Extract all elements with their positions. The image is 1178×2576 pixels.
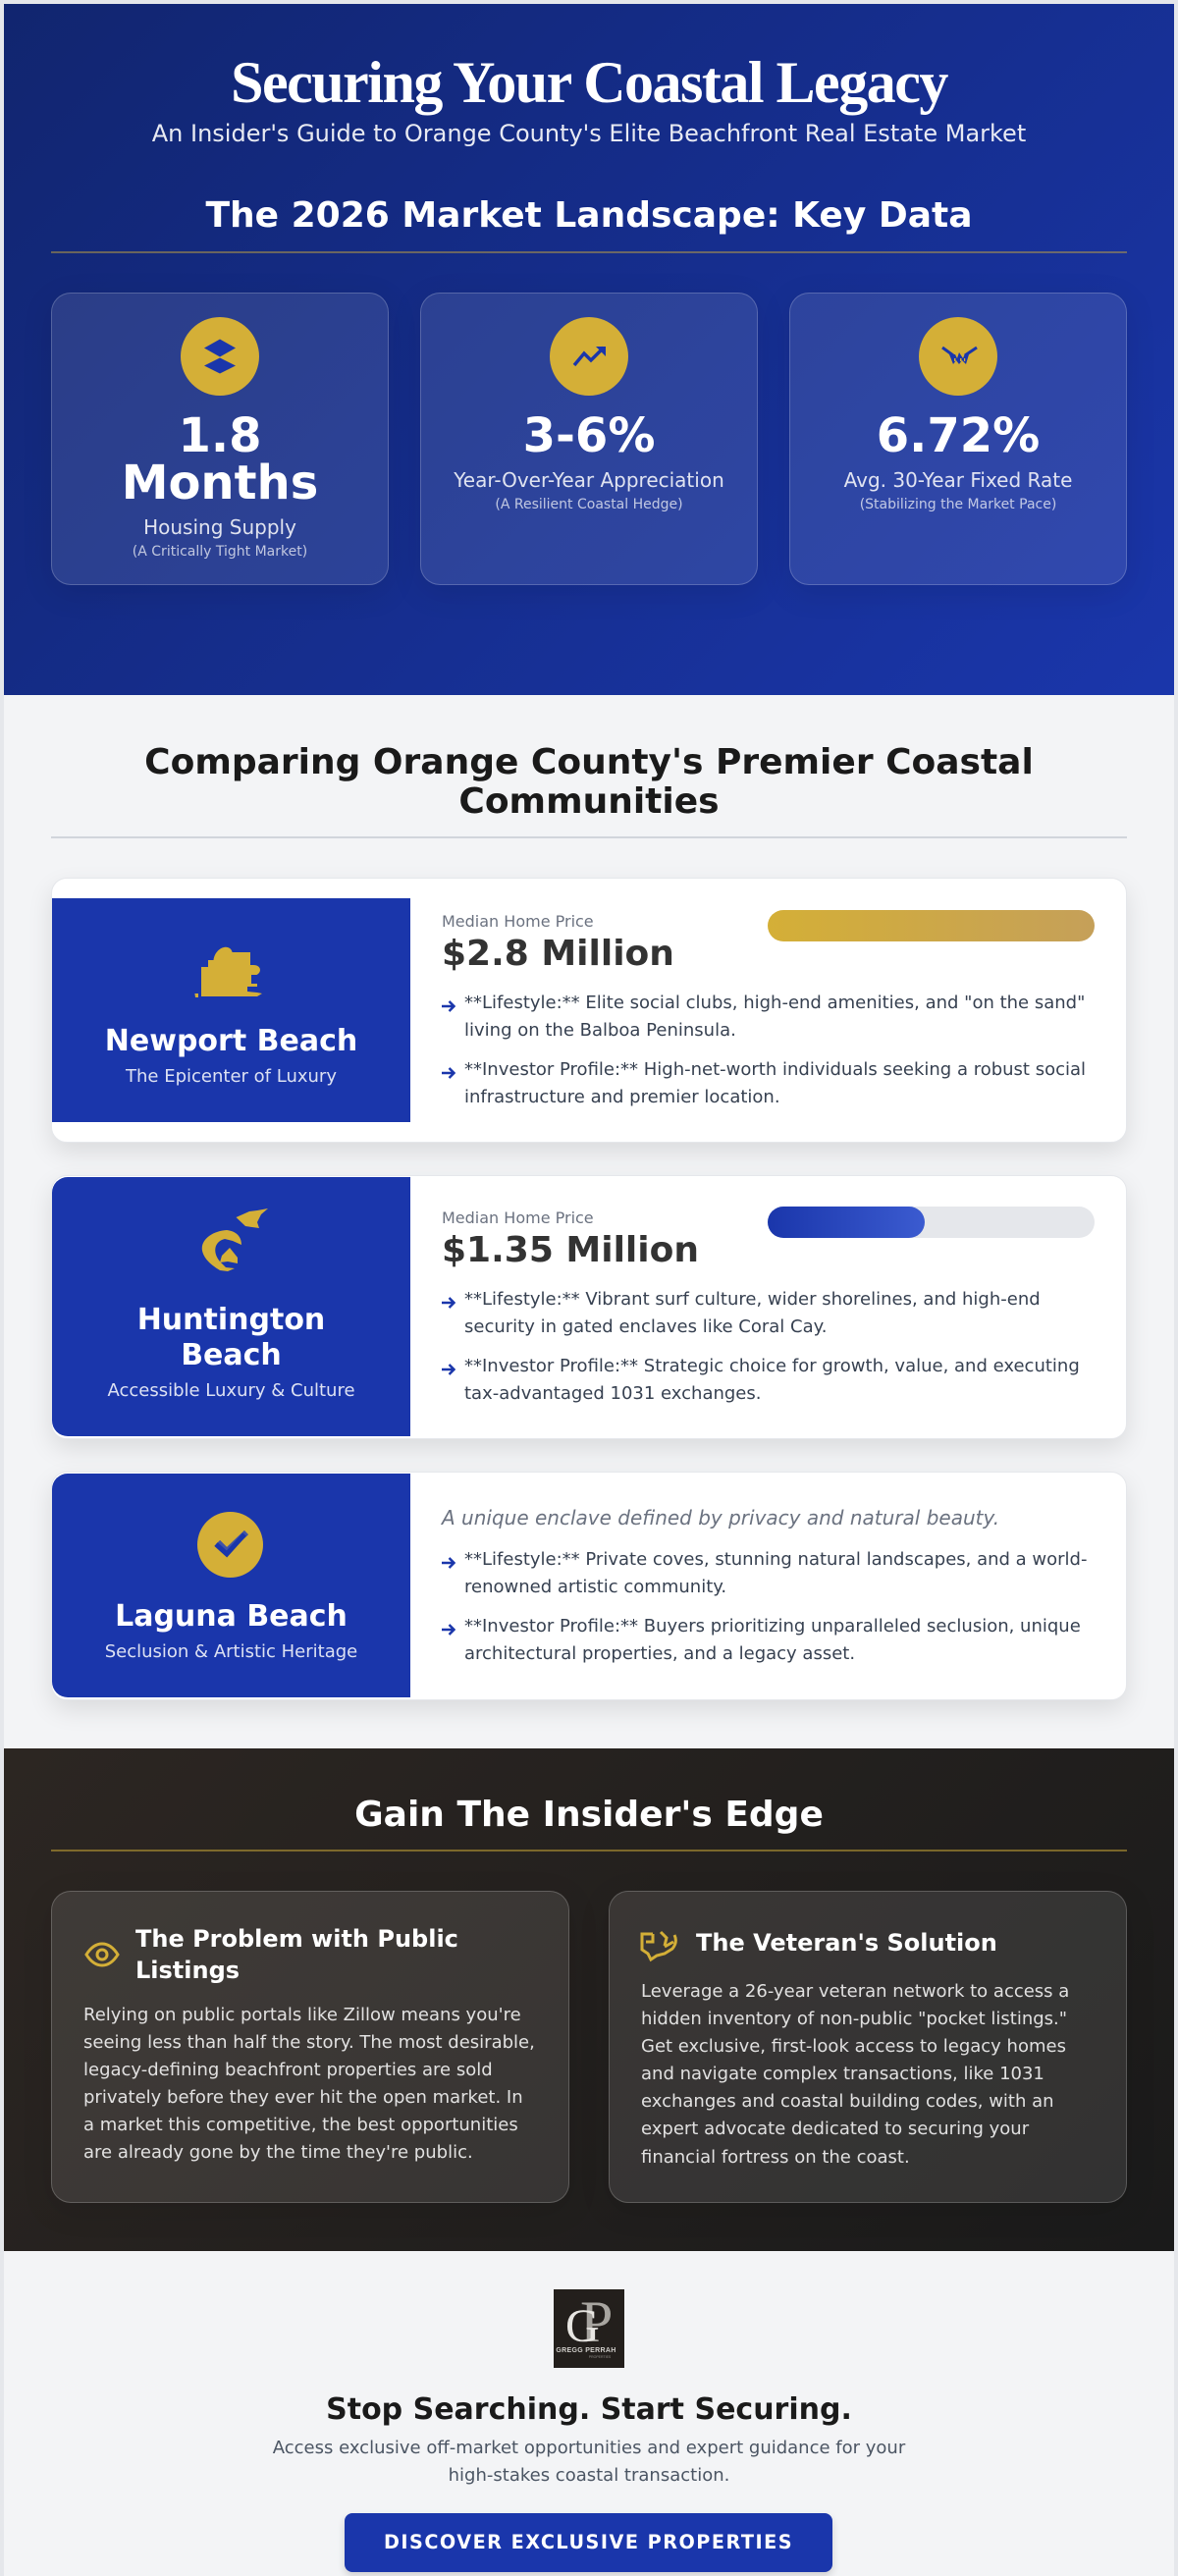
icon: newport building bbox=[194, 946, 262, 997]
logo: P bbox=[580, 2289, 613, 2354]
text: problem body: a market this competitive, the best opportunities bbox=[83, 2115, 518, 2135]
text: laguna lifestyle: **Lifestyle:** Private coves, stunning natural landscapes, and a world- bbox=[464, 1549, 1087, 1570]
text: newport lifestyle: **Lifestyle:** Elite social clubs, high-end amenities, and "on the sand" bbox=[464, 992, 1085, 1013]
heading: insider edge: Gain The Insider's Edge bbox=[354, 1795, 824, 1835]
icon: arrow bbox=[442, 1364, 455, 1375]
text: problem body: privately before they ever hit the open market. In bbox=[83, 2087, 523, 2108]
panel: laguna card bbox=[51, 1472, 1127, 1700]
text: huntington name bbox=[137, 1303, 325, 1372]
text: solution body: expert advocate dedicated to securing your bbox=[641, 2119, 1029, 2139]
text: newport tagline: The Epicenter of Luxury bbox=[126, 1066, 337, 1087]
subtitle: An Insider's Guide to Orange County's Elite Beachfront Real Estate Market bbox=[152, 120, 1026, 147]
logo: GREGG PERRAH bbox=[556, 2347, 616, 2354]
text: newport investor: infrastructure and premier location. bbox=[464, 1087, 780, 1107]
stat: 6.72% bbox=[844, 408, 1072, 512]
text: newport lifestyle bbox=[464, 992, 1085, 1041]
text: problem body bbox=[83, 2005, 535, 2163]
text: huntington name: Beach bbox=[181, 1338, 282, 1372]
text: solution body: Get exclusive, first-look access to legacy homes bbox=[641, 2036, 1066, 2057]
text: huntington price label: Median Home Price bbox=[442, 1208, 594, 1227]
divider bbox=[51, 1850, 1127, 1852]
panel: solution bbox=[609, 1891, 1127, 2203]
stat: 6.72%: (Stabilizing the Market Pace) bbox=[860, 497, 1056, 512]
text: laguna investor: architectural properties, and a legacy asset. bbox=[464, 1643, 855, 1664]
text: huntington lifestyle: **Lifestyle:** Vibrant surf culture, wider shorelines, and high-end bbox=[464, 1288, 1041, 1310]
text: huntington investor: tax-advantaged 1031 exchanges. bbox=[464, 1383, 761, 1404]
panel: newport header bbox=[52, 898, 410, 1122]
button bbox=[345, 2513, 832, 2572]
button: DISCOVER EXCLUSIVE PROPERTIES bbox=[384, 2531, 793, 2553]
text: problem heading bbox=[135, 1925, 458, 1984]
icon: arrow bbox=[442, 1067, 455, 1079]
text: problem heading: The Problem with Public bbox=[135, 1925, 458, 1953]
bar: huntington price bbox=[768, 1207, 1095, 1238]
panel: problem bbox=[51, 1891, 569, 2203]
text: newport name: Newport Beach bbox=[105, 1024, 357, 1058]
icon: arrow bbox=[442, 1557, 455, 1569]
text: solution body: hidden inventory of non-public "pocket listings." bbox=[641, 2009, 1067, 2029]
text: laguna lifestyle bbox=[464, 1549, 1087, 1597]
comparison section background bbox=[4, 695, 1174, 1748]
text: huntington price: $1.35 Million bbox=[442, 1230, 699, 1270]
insider section background bbox=[4, 1748, 1174, 2251]
header section: market landscape bbox=[4, 4, 1174, 695]
text: laguna tagline: Seclusion & Artistic Heritage bbox=[105, 1641, 357, 1662]
text: problem body: are already gone by the time they're public. bbox=[83, 2142, 473, 2163]
text: huntington tagline: Accessible Luxury & Culture bbox=[107, 1380, 355, 1401]
text: call to action: Access exclusive off-market opportunities and expert guidance for your bbox=[273, 2438, 905, 2458]
text: problem body: seeing less than half the story. The most desirable, bbox=[83, 2032, 535, 2053]
panel: fixed rate bbox=[789, 293, 1127, 585]
text: call to action bbox=[273, 2438, 905, 2486]
icon: eye bbox=[84, 1942, 120, 1967]
stat: 6.72%: 6.72% bbox=[877, 408, 1040, 463]
text: huntington investor: **Investor Profile:** Strategic choice for growth, value, and executing bbox=[464, 1356, 1080, 1376]
text: huntington investor bbox=[464, 1356, 1080, 1404]
text: newport lifestyle: living on the Balboa Peninsula. bbox=[464, 1019, 736, 1041]
heading: comparison bbox=[144, 742, 1034, 822]
panel: laguna header bbox=[52, 1474, 410, 1697]
logo: PROPERTIES bbox=[589, 2355, 612, 2359]
divider bbox=[51, 836, 1127, 838]
text: solution body bbox=[641, 1981, 1069, 2168]
logo: G bbox=[565, 2300, 600, 2352]
heading: comparison: Communities bbox=[458, 781, 720, 822]
panel: housing supply bbox=[51, 293, 389, 585]
title: Securing Your Coastal Legacy bbox=[231, 50, 947, 115]
icon: veteran bbox=[640, 1931, 677, 1961]
logo bbox=[554, 2289, 624, 2368]
text: laguna lifestyle: renowned artistic community. bbox=[464, 1577, 726, 1597]
heading: comparison: Comparing Orange County's Premier Coastal bbox=[144, 742, 1034, 782]
bar: newport price bbox=[768, 910, 1095, 941]
stat: 3-6% bbox=[454, 408, 724, 512]
icon: huntington wave bbox=[202, 1208, 268, 1271]
text: solution body: exchanges and coastal building codes, with an bbox=[641, 2091, 1054, 2112]
panel: huntington card bbox=[51, 1175, 1127, 1439]
heading: key data: The 2026 Market Landscape: Key Data bbox=[205, 195, 973, 236]
stat: 1.8 months: Housing Supply bbox=[143, 515, 296, 539]
text: laguna investor: **Investor Profile:** Buyers prioritizing unparalleled seclusion, unique bbox=[464, 1616, 1081, 1637]
stat: 3-6%: 3-6% bbox=[523, 408, 655, 463]
stat: 6.72%: Avg. 30-Year Fixed Rate bbox=[844, 468, 1072, 492]
stat: 3-6%: Year-Over-Year Appreciation bbox=[454, 468, 724, 492]
icon: laguna check bbox=[197, 1512, 263, 1578]
text: newport price: $2.8 Million bbox=[442, 934, 674, 974]
text: call to action: high-stakes coastal transaction. bbox=[449, 2465, 729, 2486]
text: laguna investor bbox=[464, 1616, 1081, 1664]
text: laguna name: Laguna Beach bbox=[115, 1599, 348, 1634]
icon: arrow bbox=[442, 1000, 455, 1012]
heading: call to action: Stop Searching. Start Securing. bbox=[326, 2392, 852, 2427]
panel: huntington header bbox=[52, 1177, 410, 1436]
icon: layers bbox=[181, 317, 259, 396]
text: laguna intro: A unique enclave defined by privacy and natural beauty. bbox=[442, 1506, 999, 1530]
panel: appreciation bbox=[420, 293, 758, 585]
footer section background bbox=[4, 2251, 1174, 2576]
text: huntington lifestyle bbox=[464, 1288, 1041, 1337]
stat: 1.8 months bbox=[122, 408, 318, 560]
text: newport investor bbox=[464, 1059, 1086, 1107]
icon: arrow bbox=[442, 1624, 455, 1636]
panel: newport card bbox=[51, 878, 1127, 1143]
icon: arrow bbox=[442, 1297, 455, 1309]
icon: trend up bbox=[550, 317, 628, 396]
text: solution body: Leverage a 26-year veteran network to access a bbox=[641, 1981, 1069, 2002]
stat: 1.8 months: 1.8 bbox=[178, 408, 262, 463]
text: solution body: and navigate complex transactions, like 1031 bbox=[641, 2064, 1044, 2084]
text: huntington lifestyle: security in gated enclaves like Coral Cay. bbox=[464, 1315, 827, 1337]
stat: 1.8 months: Months bbox=[122, 456, 318, 510]
text: problem body: Relying on public portals like Zillow means you're bbox=[83, 2005, 521, 2025]
text: newport price label: Median Home Price bbox=[442, 912, 594, 931]
text: problem body: legacy-defining beachfront properties are sold bbox=[83, 2060, 493, 2080]
stat: 1.8 months: (A Critically Tight Market) bbox=[133, 544, 307, 560]
text: problem heading: Listings bbox=[135, 1957, 240, 1984]
text: huntington name: Huntington bbox=[137, 1303, 325, 1337]
divider bbox=[51, 251, 1127, 253]
text: solution heading: The Veteran's Solution bbox=[696, 1929, 997, 1957]
icon: market crown bbox=[919, 317, 997, 396]
stat: 3-6%: (A Resilient Coastal Hedge) bbox=[495, 497, 683, 512]
text: financial fortress on the coast. bbox=[641, 2147, 910, 2168]
text: newport investor: **Investor Profile:** High-net-worth individuals seeking a robust social bbox=[464, 1059, 1086, 1080]
